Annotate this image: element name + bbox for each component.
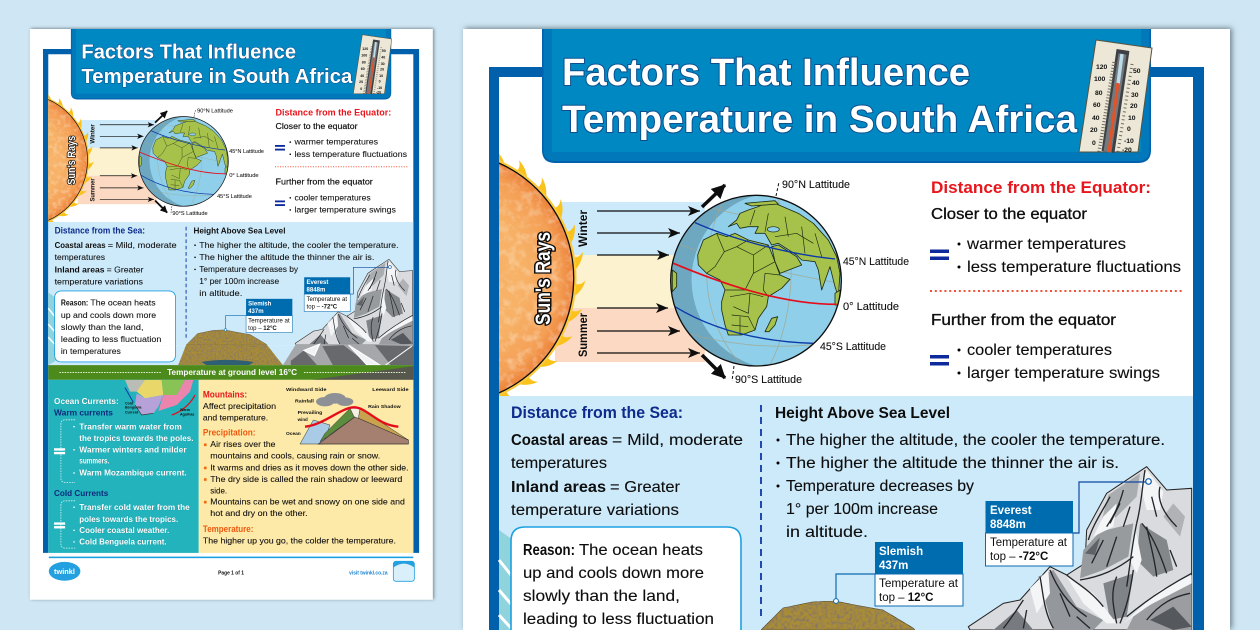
preview diagram: sun rays and globe: 0° Lattitude [229, 173, 259, 179]
preview text: distance from the sea: up and cools down more [61, 310, 156, 320]
preview text: distance from the sea: Reason: [61, 298, 88, 308]
text: distance from the sea: = Greater [610, 479, 681, 496]
text: distance from the sea [511, 403, 743, 628]
preview callout text: 437m [248, 309, 264, 315]
preview panel: mountains: Prevailing [298, 410, 323, 415]
preview diagram: sun rays and globe: Sun's Rays [66, 136, 78, 185]
preview panel: mountains: The dry side is called the rain shadow or leeward [210, 475, 402, 484]
text: distance from the sea: The ocean heats [579, 542, 703, 559]
preview text: height above sea level: Temperature decreases by [199, 264, 299, 274]
preview callout text: top – -72°C [307, 304, 338, 310]
preview text: distance from the sea: The ocean heats [90, 298, 156, 308]
text: distance from the equator [930, 178, 1183, 382]
preview panel: mountains: The higher up you go, the colder the temperature. [203, 536, 396, 545]
close-up sheet [463, 29, 1230, 630]
preview panel: mountains: Rain Shadow [368, 404, 401, 409]
preview text: distance from the sea: = Greater [107, 265, 144, 275]
thermometer scale: -10 [1124, 138, 1134, 145]
preview thermometer scale: 0 [379, 80, 381, 84]
thermometer scale: 20 [1090, 127, 1098, 134]
preview text: distance from the equator: warmer temperatures [293, 137, 378, 147]
thermometer scale: 0 [1127, 126, 1131, 133]
text: distance from the sea: Distance from the Sea: [511, 403, 683, 422]
preview text: distance from the sea: Coastal areas [55, 240, 106, 250]
text: distance from the equator: cooler temperatures [967, 342, 1112, 359]
preview panel: mountains: Rainfall [295, 398, 314, 403]
preview text: distance from the sea: leading to less fluctuation [61, 334, 162, 344]
preview text: distance from the equator: cooler temperatures [294, 192, 371, 202]
preview text: distance from the sea: in temperatures [61, 346, 121, 356]
callout text: Slemish and Everest: Temperature at [879, 578, 959, 590]
preview panel: mountains: Leeward Side [372, 387, 409, 392]
preview panel: ocean currents: Cold Benguela current. [79, 537, 167, 546]
preview panel: mountains: Temperature: [203, 524, 253, 534]
preview panel: mountains: mountains and cools, causing rain or snow. [210, 452, 380, 461]
preview text: distance from the equator: Further from the equator [276, 177, 373, 187]
preview title banner with thermometer [71, 29, 392, 99]
preview hill [178, 330, 283, 365]
preview panel: mountains [199, 380, 413, 553]
preview diagram: sun rays and globe: 45°N Lattitude [229, 149, 264, 155]
text: distance from the sea: leading to less fluctuation [523, 611, 714, 628]
thermometer scale: 120 [1096, 64, 1108, 71]
diagram: sun rays and globe: 45°S Lattitude [820, 341, 886, 353]
map of South Africa: Cold [125, 401, 133, 405]
text: height above sea level: in altitude. [786, 524, 868, 541]
map of South Africa: Benguela [125, 406, 142, 410]
preview text: distance from the equator: Closer to the equator [276, 121, 358, 131]
preview panel: ocean currents: the tropics towards the poles. [79, 434, 193, 443]
thermometer scale: 0 [1092, 140, 1096, 147]
callout text: Slemish and Everest: 8848m [990, 519, 1026, 531]
preview panel: mountains: Ocean [286, 431, 301, 436]
preview panel: ocean currents: Warmer winters and milder [79, 445, 187, 454]
preview panel: mountains: Mountains: [203, 390, 247, 400]
preview text: distance from the equator: less temperature fluctuations [294, 149, 407, 159]
preview panel: mountains: Air rises over the [210, 440, 276, 449]
preview mountain [283, 259, 413, 365]
preview thermometer scale [359, 47, 386, 95]
preview thermometer scale: 40 [360, 74, 364, 78]
thermometer scale: 20 [1130, 103, 1138, 110]
text: distance from the equator: larger temperature swings [967, 365, 1160, 382]
text: distance from the sea: up and cools down more [523, 565, 704, 582]
preview thermometer scale: 120 [362, 47, 368, 51]
text: distance from the equator: Distance from the Equator: [931, 178, 1151, 197]
diagram: sun rays and globe: Summer [576, 313, 590, 357]
text: distance from the equator: warmer temperatures [966, 236, 1126, 253]
thermometer scale: 100 [1094, 76, 1106, 83]
preview thermometer scale: 40 [381, 55, 385, 59]
close-up frame [489, 67, 1204, 630]
preview text: height above sea level: 1° per 100m increase [199, 276, 280, 286]
preview title: Temperature in South Africa [81, 66, 353, 88]
preview text: distance from the sea [55, 226, 177, 356]
preview footer: visit twinkl.co.za [349, 570, 388, 576]
preview callout text: Slemish [248, 302, 272, 308]
text: distance from the equator: Closer to the equator [931, 206, 1088, 223]
preview panel: mountains: side. [210, 486, 227, 495]
preview panel: mountains: and temperature. [203, 413, 268, 422]
preview panel: ocean currents: Transfer warm water from [79, 422, 182, 431]
text: distance from the sea: temperatures [511, 455, 607, 472]
title banner with thermometer [542, 29, 1152, 163]
text: height above sea level: 1° per 100m increase [786, 501, 938, 518]
preview callout text: Temperature at [248, 319, 290, 325]
preview callout text: Everest [307, 280, 328, 286]
preview diagram: sun rays and globe: 90°S Lattitude [172, 211, 208, 217]
map of South Africa: Warm [180, 408, 191, 412]
thermometer scale: 80 [1095, 90, 1103, 97]
text: distance from the equator: Further from the equator [931, 312, 1117, 329]
preview panel: ocean currents: Warm currents [54, 409, 113, 418]
preview diagram: sun rays and globe: 45°S Lattitude [217, 194, 252, 200]
preview panel: ocean currents: poles towards the tropics. [79, 515, 178, 524]
thermometer scale: 50 [1133, 68, 1141, 75]
preview text: height above sea level [193, 226, 399, 298]
preview diagram: sun rays and globe: 90°N Lattitude [197, 109, 233, 115]
preview panel: mountains: It warms and dries as it moves down the other side. [210, 463, 409, 472]
preview footer [49, 557, 414, 581]
diagram: sun rays and globe [320, 148, 909, 406]
preview thermometer scale: 20 [380, 68, 384, 72]
diagram: sun rays and globe: 90°S Lattitude [735, 374, 802, 386]
preview thermometer scale: 10 [379, 74, 383, 78]
preview thermometer scale: 20 [359, 80, 363, 84]
preview footer: twinkl [54, 567, 75, 576]
preview text: height above sea level: Height Above Sea Level [193, 226, 285, 236]
text: distance from the sea: slowly than the land, [523, 588, 680, 605]
preview panel: ocean currents [48, 380, 199, 553]
text: distance from the sea: Inland areas [511, 479, 606, 496]
poster: full page preview [0, 29, 433, 600]
poster: enlarged close-up [320, 29, 1230, 630]
preview text: distance from the sea: Inland areas [55, 265, 105, 275]
preview callout text: Temperature at [307, 297, 347, 303]
preview text: distance from the sea: temperatures [55, 252, 105, 262]
thermometer scale [1090, 64, 1141, 154]
preview panel: ocean currents: summers. [79, 456, 109, 465]
preview text: distance from the sea: temperature variations [55, 277, 143, 287]
preview callout text [248, 280, 347, 332]
map of South Africa [125, 380, 195, 417]
preview callout text: 8848m [307, 287, 325, 293]
preview text: height above sea level: in altitude. [199, 288, 242, 298]
preview diagram: sun rays and globe: Winter [90, 124, 97, 144]
panel: sea distance and height [499, 396, 1193, 630]
diagram: sun rays and globe: Winter [576, 210, 590, 247]
diagram: sun rays and globe: Sun's Rays [532, 232, 555, 325]
title: Factors That Influence [562, 52, 970, 94]
callout boxes [834, 479, 1151, 606]
preview callout text: top – 12°C [248, 326, 277, 332]
title [562, 52, 1078, 141]
thermometer scale: 60 [1093, 102, 1101, 109]
preview text: distance from the equator: Distance from the Equator: [276, 107, 391, 117]
preview title [81, 41, 353, 88]
Everest mountain [968, 467, 1192, 630]
preview text: distance from the sea: = Mild, moderate [108, 240, 177, 250]
callout text: Slemish and Everest: Temperature at [990, 537, 1068, 549]
text: distance from the equator: less temperature fluctuations [967, 259, 1181, 276]
thermometer scale: 30 [1131, 92, 1139, 99]
text: distance from the sea: Reason: [523, 542, 575, 559]
preview panel: ocean currents: Transfer cold water from the [79, 503, 190, 512]
preview callout boxes [224, 266, 391, 333]
thermometer scale: 40 [1132, 80, 1140, 87]
preview panel: ocean currents: Cooler coastal weather. [79, 526, 169, 535]
preview diagram: sun rays and globe [0, 92, 264, 228]
preview thermometer scale: -10 [377, 86, 382, 90]
preview panel: mountains: Affect precipitation [203, 402, 276, 411]
Slemish hill [761, 601, 915, 630]
text: distance from the sea: temperature variations [511, 502, 679, 519]
thermometer scale: 10 [1128, 115, 1136, 122]
callout text: Slemish and Everest: Everest [990, 505, 1032, 517]
preview thermometer scale: 100 [361, 53, 367, 57]
preview panel: ocean currents: Cold Currents [54, 489, 109, 498]
rain shadow diagram [300, 393, 408, 444]
thermometer scale: -20 [1122, 147, 1132, 154]
callout text: Slemish and Everest: top – -72°C [990, 551, 1048, 563]
preview text: distance from the sea: Distance from the Sea: [55, 226, 145, 236]
text: height above sea level [775, 405, 1165, 541]
text: height above sea level: The higher the altitude the thinner the air is. [786, 455, 1119, 472]
map of South Africa: Agulhas [180, 413, 194, 417]
text: height above sea level: Temperature decreases by [786, 478, 974, 495]
preview panel: ocean currents: Ocean Currents: [54, 397, 119, 406]
preview thermometer scale: 30 [381, 62, 385, 66]
preview ground level strip: Temperature at ground level 16°C [167, 368, 297, 377]
preview ground level strip [48, 365, 413, 380]
title: Temperature in South Africa [562, 99, 1078, 141]
preview text: height above sea level: The higher the altitude the thinner the air is. [199, 252, 374, 262]
callout text: Slemish and Everest [879, 505, 1068, 604]
text: distance from the sea: = Mild, moderate [612, 432, 743, 449]
preview panel: ocean currents: Warm Mozambique current. [79, 469, 187, 478]
preview panel: mountains: hot and dry on the other. [210, 509, 308, 518]
preview panel: mountains: wind [297, 417, 308, 422]
preview thermometer scale: -20 [376, 91, 381, 95]
text: distance from the sea: Coastal areas [511, 432, 608, 449]
preview thermometer scale: 0 [360, 87, 362, 91]
preview diagram: sun rays and globe: Summer [90, 178, 97, 202]
diagram: sun rays and globe: 45°N Lattitude [843, 256, 909, 268]
preview panel: sea distance and height [48, 222, 413, 365]
preview text: distance from the equator: larger temperature swings [294, 205, 396, 215]
thermometer scale: 40 [1092, 115, 1100, 122]
map of South Africa: Current [125, 411, 139, 415]
preview frame [43, 49, 419, 553]
preview sheet [30, 29, 433, 600]
text: height above sea level: Height Above Sea Level [775, 405, 950, 422]
preview text: distance from the equator [275, 107, 408, 215]
preview title: Factors That Influence [81, 41, 296, 63]
callout text: Slemish and Everest: 437m [879, 560, 908, 572]
preview footer: Page 1 of 1 [218, 570, 245, 576]
preview thermometer scale: 80 [362, 61, 366, 65]
preview thermometer scale: 60 [361, 67, 365, 71]
text: height above sea level: The higher the altitude, the cooler the temperature. [786, 432, 1165, 449]
preview text: distance from the sea: slowly than the land, [61, 322, 143, 332]
callout text: Slemish and Everest: Slemish [879, 546, 923, 558]
preview panel: mountains: Windward Side [286, 387, 327, 392]
preview thermometer scale: 50 [382, 49, 386, 53]
preview text: height above sea level: The higher the altitude, the cooler the temperature. [199, 240, 399, 250]
diagram: sun rays and globe: 90°N Lattitude [782, 179, 850, 191]
callout text: Slemish and Everest: top – 12°C [879, 592, 933, 604]
preview panel: mountains: Mountains can be wet and snowy on one side and [210, 498, 405, 507]
diagram: sun rays and globe: 0° Lattitude [843, 301, 899, 313]
preview panel: mountains: Precipitation: [203, 428, 256, 438]
